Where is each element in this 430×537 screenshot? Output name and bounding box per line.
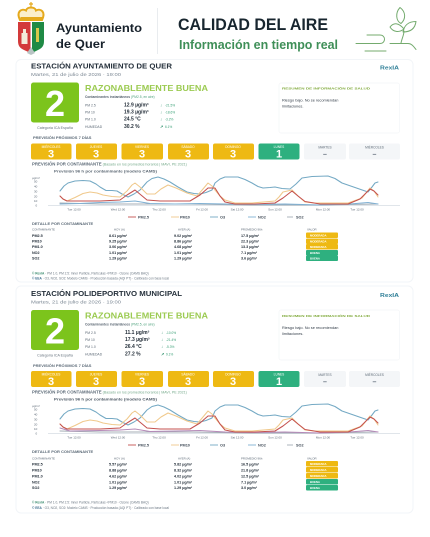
air quality rating: RAZONABLEMENTE BUENA (85, 83, 208, 93)
detail table: 1.29 µg/m³ (109, 486, 128, 490)
detail table: SO2 (32, 486, 39, 490)
instantaneous readings: -18.6% (165, 110, 175, 114)
detail table: 21.8 µg/m³ (241, 468, 260, 472)
chart legend: PM2.5 (138, 444, 149, 448)
instantaneous readings: HUMEDAD (85, 352, 103, 356)
municipal logo: coat of arms (18, 2, 44, 55)
subtitle: Información en tiempo real (179, 38, 338, 52)
chart legend: PM2.5 (138, 216, 149, 220)
health summary box: Riesgo bajo. No se recomiendan (282, 98, 338, 102)
data source notes: © EEA · O3, NO2, SO2: Modelo CAMS · Producción basada (AQI PT) · Calibrado con base local (32, 506, 169, 510)
air quality index badge: 2 (45, 310, 65, 352)
detail table: 9.25 µg/m³ (109, 240, 128, 244)
detail table: 16.5 µg/m³ (241, 462, 260, 466)
brand: RexIA (380, 293, 399, 299)
x axis labels: Tue 12:00 (67, 208, 81, 212)
line chart: pollutant forecast: Wed 12:00 (111, 436, 126, 440)
line chart: pollutant forecast: 10 (34, 199, 38, 203)
instantaneous readings: 9.1% (166, 352, 173, 356)
line chart: pollutant forecast: 40 (34, 412, 38, 416)
7-day forecast tiles: 3 (139, 148, 145, 160)
instantaneous readings: 19.3 µg/m³ (124, 110, 149, 116)
line chart: pollutant forecast: 10 (34, 427, 38, 431)
detail table: 5.82 µg/m³ (174, 462, 193, 466)
detail table: VALOR (307, 228, 317, 232)
7-day forecast tiles: MIÉRCOLES (42, 372, 60, 376)
x axis labels (67, 208, 364, 212)
detail table: 22.3 µg/m³ (241, 240, 260, 244)
data source notes (32, 500, 169, 510)
chart subtitle: Previsión 96 h por contaminante (modelo CAMS) (54, 398, 158, 402)
chart legend: PM10 (180, 216, 190, 220)
7-day forecast tiles: VIERNES (135, 145, 149, 149)
icon: plant and wind (356, 8, 416, 51)
detail table: NO2 (32, 480, 40, 484)
health summary box: Riesgo bajo. No se recomiendan (282, 325, 338, 330)
health summary box: RESUMEN DE INFORMACIÓN DE SALUD (282, 86, 371, 90)
data source notes: © RexIA · PM 1.0, PM 2.5: Inner Particle, Partículas <PM10 · Ozone (CAMS BAQ) (32, 272, 149, 276)
detail table: HOY (A) (114, 456, 125, 460)
7-day forecast tiles: 1 (276, 148, 282, 160)
date: Martes, 21 de julio de 2026 · 19:00 (31, 300, 122, 304)
line chart: pollutant forecast: 50 (34, 180, 38, 184)
7-day forecast tiles (31, 371, 400, 388)
instantaneous readings: Contaminantes instantáneos (PM2.5, en aire) (85, 322, 155, 326)
detail table: 4.62 µg/m³ (109, 474, 128, 478)
detail table: 8.86 µg/m³ (174, 240, 193, 244)
air quality index badge: Categoría ICA España (37, 126, 73, 130)
instantaneous readings (85, 95, 175, 130)
detail table: PM10 (32, 468, 42, 472)
7-day forecast tiles: – (373, 152, 377, 158)
air quality index badge: Categoría ICA España (37, 354, 73, 358)
7-day forecast tiles: SÁBADO (181, 372, 195, 376)
detail table: 17.5 µg/m³ (241, 234, 260, 238)
data source notes: © RexIA · PM 1.0, PM 2.5: Inner Particle, Partículas <PM10 · Ozone (CAMS BAQ) (32, 500, 149, 504)
line chart: pollutant forecast: µg/m³ (32, 404, 40, 408)
line chart: pollutant forecast: 30 (34, 418, 38, 422)
instantaneous readings: Contaminantes instantáneos (PM2.5, en aire) (85, 95, 155, 99)
7-day forecast tiles: 1 (276, 376, 282, 388)
detail table: PM2.5 (32, 234, 43, 238)
station heading: ESTACIÓN POLIDEPORTIVO MUNICIPAL (31, 289, 183, 298)
detail table: MODERADA (310, 245, 326, 249)
instantaneous readings: PM 2.5 (85, 104, 96, 108)
detail table: 3.0 µg/m³ (241, 486, 258, 490)
detail table: 1.01 µg/m³ (109, 480, 128, 484)
line chart: pollutant forecast (32, 404, 400, 440)
instantaneous readings: ↓ (160, 102, 162, 108)
line chart: pollutant forecast: Sat 12:00 (231, 436, 244, 440)
detail table: 4.02 µg/m³ (174, 474, 193, 478)
x axis labels: Sat 12:00 (231, 208, 244, 212)
instantaneous readings: PM 10 (85, 338, 95, 342)
7-day forecast tiles: SÁBADO (181, 145, 195, 149)
detail table: CONTAMINANTE (32, 456, 55, 460)
line chart: pollutant forecast: Fri 12:00 (196, 436, 208, 440)
x axis labels: Mon 12:00 (316, 208, 330, 212)
instantaneous readings: -3.2% (165, 118, 173, 122)
chart legend: O3 (220, 444, 225, 448)
instantaneous readings: -21.4% (166, 338, 176, 342)
air quality index badge (31, 310, 79, 358)
detail table: AYER (A) (178, 456, 190, 460)
chart legend: PM10 (180, 444, 190, 448)
line chart: pollutant forecast: Mon 12:00 (316, 436, 330, 440)
forecast heading: PREVISIÓN PRÓXIMOS 7 DÍAS (33, 135, 92, 140)
instantaneous readings: -10.0% (166, 331, 176, 335)
7-day forecast tiles: – (323, 379, 327, 386)
detail table: PM10 (32, 240, 42, 244)
7-day forecast tiles: DOMINGO (225, 372, 241, 376)
line chart: pollutant forecast: 0 (36, 204, 38, 208)
7-day forecast tiles: 3 (93, 376, 99, 388)
line chart: pollutant forecast: 20 (34, 422, 38, 426)
detail table: 3.6 µg/m³ (241, 256, 258, 260)
detail table: AYER (A) (178, 228, 190, 232)
panel: station Ayuntamiento de Quer (16, 60, 413, 282)
chart legend: SO2 (296, 444, 304, 448)
7-day forecast tiles: 3 (139, 376, 145, 388)
7-day forecast tiles: JUEVES (90, 372, 102, 376)
instantaneous readings: ↓ (161, 337, 163, 342)
air quality index badge (31, 82, 79, 130)
forecast heading: PREVISIÓN PRÓXIMOS 7 DÍAS (33, 363, 92, 368)
x axis labels: Thu 12:00 (152, 208, 166, 212)
air quality index badge: 2 (45, 83, 65, 124)
health summary box (279, 83, 400, 133)
detail table: 7.1 µg/m³ (241, 251, 258, 255)
instantaneous readings: PM 2.5 (85, 331, 96, 335)
detail table: 1.29 µg/m³ (174, 256, 193, 260)
x axis labels: Wed 12:00 (111, 208, 126, 212)
panel: station Polideportivo Municipal (16, 286, 413, 513)
detail table: 1.29 µg/m³ (109, 256, 128, 260)
municipality name: Ayuntamiento (56, 21, 142, 35)
pollutant forecast heading: PREVISIÓN POR CONTAMINANTE (Basado en los promedios horarios | MAVI, PE 2021) (32, 390, 187, 394)
instantaneous readings: ↓ (160, 110, 162, 114)
7-day forecast tiles: MARTES (318, 146, 332, 150)
7-day forecast tiles: MIÉRCOLES (42, 144, 60, 149)
instantaneous readings: 26.4 °C (125, 344, 142, 350)
chart legend: NO2 (258, 216, 266, 220)
chart legend: O3 (220, 216, 225, 220)
detail table: MODERADA (310, 462, 326, 466)
7-day forecast tiles (31, 144, 400, 160)
x axis labels: Tue 12:00 (350, 208, 364, 212)
chart legend (128, 216, 304, 220)
instantaneous readings: PM 1.0 (85, 345, 96, 349)
health summary box (279, 310, 400, 360)
detail table: 1.01 µg/m³ (174, 480, 193, 484)
detail table: 8.32 µg/m³ (174, 468, 193, 472)
detail table: 12.5 µg/m³ (241, 474, 260, 478)
x axis labels: Fri 12:00 (196, 208, 208, 212)
line chart: pollutant forecast: 40 (34, 184, 38, 188)
detail table: NO2 (32, 251, 40, 255)
pollutant forecast heading: PREVISIÓN POR CONTAMINANTE (Basado en los promedios horarios | MAVI, PE 2021) (32, 162, 187, 166)
7-day forecast tiles: LUNES (274, 372, 284, 376)
instantaneous readings: 6.1% (165, 125, 172, 129)
detail table: 1.29 µg/m³ (174, 486, 193, 490)
line chart: pollutant forecast: Tue 12:00 (67, 436, 81, 440)
instantaneous readings: ↗ (160, 124, 163, 129)
detail heading: DETALLE POR CONTAMINANTE (32, 221, 94, 226)
line chart: pollutant forecast: 50 (34, 408, 38, 412)
instantaneous readings: 24.5 °C (124, 116, 141, 122)
detail table: 13.3 µg/m³ (241, 245, 260, 249)
detail table: PM1.0 (32, 245, 43, 249)
detail table: 9.02 µg/m³ (174, 234, 193, 238)
detail table: BUENA (310, 256, 320, 260)
detail table: 8.88 µg/m³ (109, 468, 128, 472)
detail heading: DETALLE POR CONTAMINANTE (32, 449, 94, 454)
detail table (32, 456, 338, 490)
page title: CALIDAD DEL AIRE (178, 15, 328, 34)
7-day forecast tiles: 3 (230, 376, 236, 388)
instantaneous readings: 30.2 % (124, 124, 140, 130)
7-day forecast tiles: 3 (185, 148, 191, 160)
7-day forecast tiles: 3 (93, 148, 99, 160)
instantaneous readings: ↗ (161, 352, 164, 356)
instantaneous readings: PM 10 (85, 110, 95, 114)
detail table: VALOR (307, 456, 317, 460)
7-day forecast tiles: 3 (48, 376, 54, 388)
instantaneous readings: HUMEDAD (85, 125, 103, 129)
detail table: 7.1 µg/m³ (241, 480, 258, 484)
line chart: pollutant forecast: Thu 12:00 (152, 436, 166, 440)
line chart: pollutant forecast: 20 (34, 194, 38, 198)
7-day forecast tiles: VIERNES (135, 372, 149, 376)
line chart: pollutant forecast (32, 176, 400, 208)
7-day forecast tiles: DOMINGO (225, 145, 241, 149)
detail table (32, 228, 338, 261)
instantaneous readings: ↓ (161, 330, 163, 335)
7-day forecast tiles: – (323, 152, 327, 158)
detail table: PM1.0 (32, 474, 43, 478)
chart legend: SO2 (296, 216, 304, 220)
detail table: PROMEDIO 96h (241, 228, 263, 232)
detail table: MODERADA (310, 240, 326, 244)
detail table: 3.06 µg/m³ (109, 245, 128, 249)
7-day forecast tiles: LUNES (274, 145, 284, 149)
7-day forecast tiles: 3 (230, 148, 236, 160)
health summary box: limitaciones. (282, 104, 303, 108)
instantaneous readings: ↓ (160, 116, 162, 122)
instantaneous readings: ↓ (161, 344, 163, 349)
detail table: 8.61 µg/m³ (109, 234, 128, 238)
7-day forecast tiles: MARTES (318, 373, 332, 377)
instantaneous readings: 27.2 % (125, 352, 141, 358)
detail table: 1.01 µg/m³ (109, 251, 128, 255)
instantaneous readings: -5.3% (166, 345, 174, 349)
7-day forecast tiles: 3 (185, 376, 191, 388)
detail table: 4.68 µg/m³ (174, 245, 193, 249)
detail table: HOY (A) (114, 228, 125, 232)
detail table: SO2 (32, 256, 39, 260)
instantaneous readings: -21.5% (165, 104, 175, 108)
data source notes: © EEA · O3, NO2, SO2: Modelo CAMS · Producción basada (AQI PT) · Calibrado con base local (32, 276, 169, 280)
line chart: pollutant forecast: µg/m³ (32, 176, 40, 180)
health summary box: RESUMEN DE INFORMACIÓN DE SALUD (282, 313, 371, 318)
detail table: PROMEDIO 96h (241, 456, 263, 460)
brand: RexIA (380, 66, 399, 72)
instantaneous readings: 12.9 µg/m³ (124, 102, 149, 108)
chart legend: NO2 (258, 444, 266, 448)
7-day forecast tiles: 3 (48, 148, 54, 160)
air quality rating: RAZONABLEMENTE BUENA (85, 310, 208, 320)
chart subtitle: Previsión 96 h por contaminante (modelo CAMS) (54, 170, 158, 174)
7-day forecast tiles: JUEVES (90, 145, 102, 149)
detail table: CONTAMINANTE (32, 228, 55, 232)
7-day forecast tiles: – (373, 379, 377, 386)
line chart: pollutant forecast: 0 (36, 432, 38, 436)
line chart: pollutant forecast: Tue 12:00 (350, 436, 364, 440)
station heading: ESTACIÓN AYUNTAMIENTO DE QUER (31, 62, 172, 70)
chart legend (128, 444, 304, 448)
line chart: pollutant forecast: Sun 12:00 (268, 436, 282, 440)
detail table: BUENA (310, 486, 320, 490)
date: Martes, 21 de julio de 2026 · 19:00 (31, 72, 122, 77)
detail table: 5.57 µg/m³ (109, 462, 128, 466)
line chart: pollutant forecast: 30 (34, 190, 38, 194)
detail table: MODERADA (310, 234, 326, 238)
detail table: MODERADA (310, 468, 326, 472)
7-day forecast tiles: MIÉRCOLES (365, 372, 384, 377)
health summary box: limitaciones. (282, 331, 303, 336)
detail table: BUENA (310, 251, 320, 255)
detail table: PM2.5 (32, 462, 43, 466)
data source notes (32, 272, 169, 280)
instantaneous readings: 17.3 µg/m³ (125, 337, 150, 343)
instantaneous readings (85, 322, 176, 358)
7-day forecast tiles: MIÉRCOLES (365, 144, 384, 150)
municipality name (56, 21, 142, 51)
detail table: MODERADA (310, 474, 326, 478)
x axis labels: Sun 12:00 (268, 208, 282, 212)
instantaneous readings: PM 1.0 (85, 118, 96, 122)
instantaneous readings: 11.1 µg/m³ (125, 330, 150, 336)
municipality name: de Quer (56, 37, 105, 51)
detail table: 1.01 µg/m³ (174, 251, 193, 255)
detail table: BUENA (310, 480, 320, 484)
